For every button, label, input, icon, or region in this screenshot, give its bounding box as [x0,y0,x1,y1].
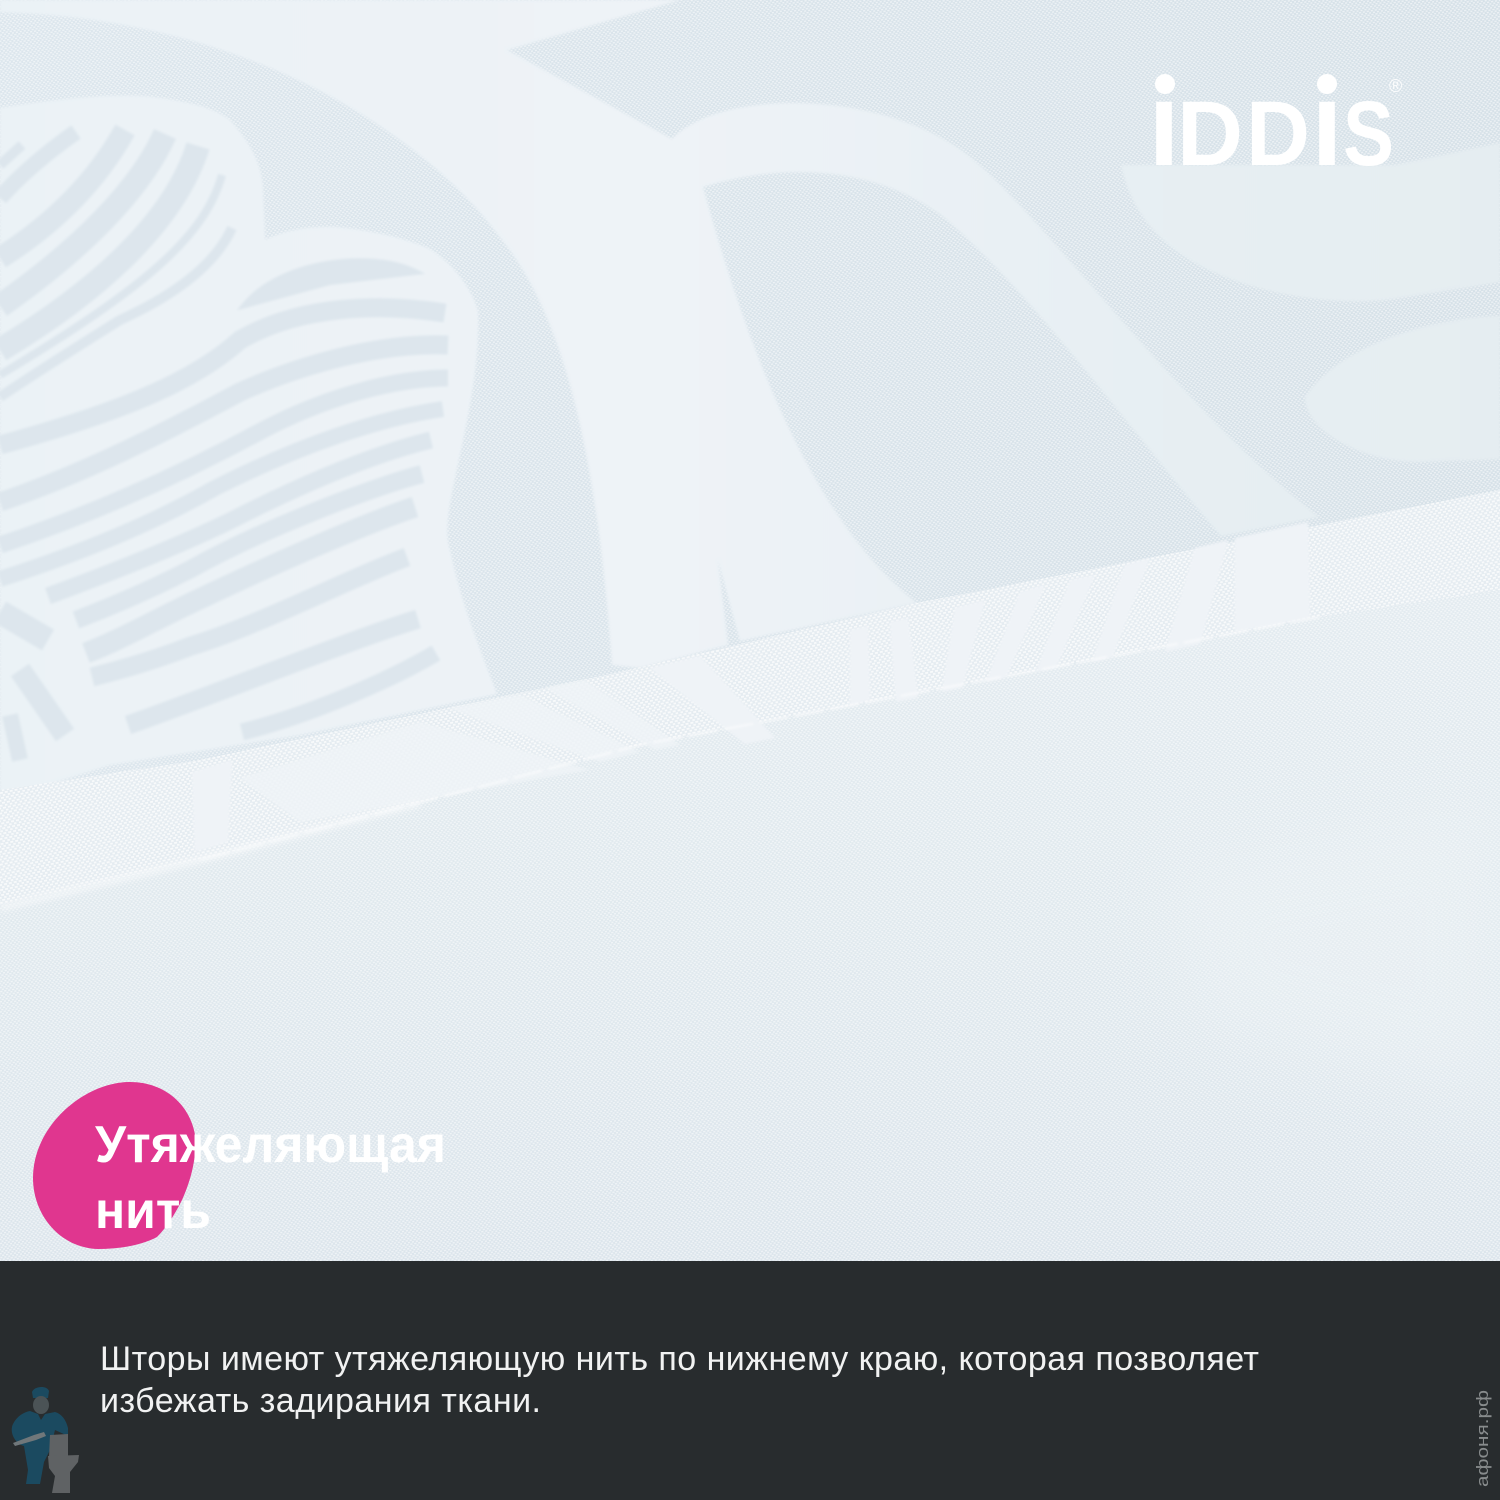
heading: нить [95,1182,211,1240]
dark footer panel [0,1261,1500,1500]
heading [95,1116,446,1240]
watermark: афоня.рф [1473,1390,1492,1487]
logo: IDDIS [1149,74,1402,185]
description text [100,1340,1259,1420]
description text: избежать задирания ткани. [100,1382,541,1420]
logo: IDDIS: ® [1389,76,1402,96]
logo: IDDIS: D [1177,83,1243,185]
lower cloth [0,590,1500,1261]
logo: IDDIS: D [1246,83,1310,185]
heading: Утяжеляющая [95,1116,446,1174]
logo: IDDIS: S [1343,83,1394,185]
logo: IDDIS: I [1312,83,1342,185]
icon: plumber with toilet [12,1387,79,1493]
description text: Шторы имеют утяжеляющую нить по нижнему краю, которая позволяет [100,1340,1259,1378]
patterned leaf stripes [0,130,448,760]
logo: IDDIS: I [1149,83,1179,185]
hem band [0,490,1500,905]
seam [200,617,1320,860]
pink blob [33,1082,195,1249]
